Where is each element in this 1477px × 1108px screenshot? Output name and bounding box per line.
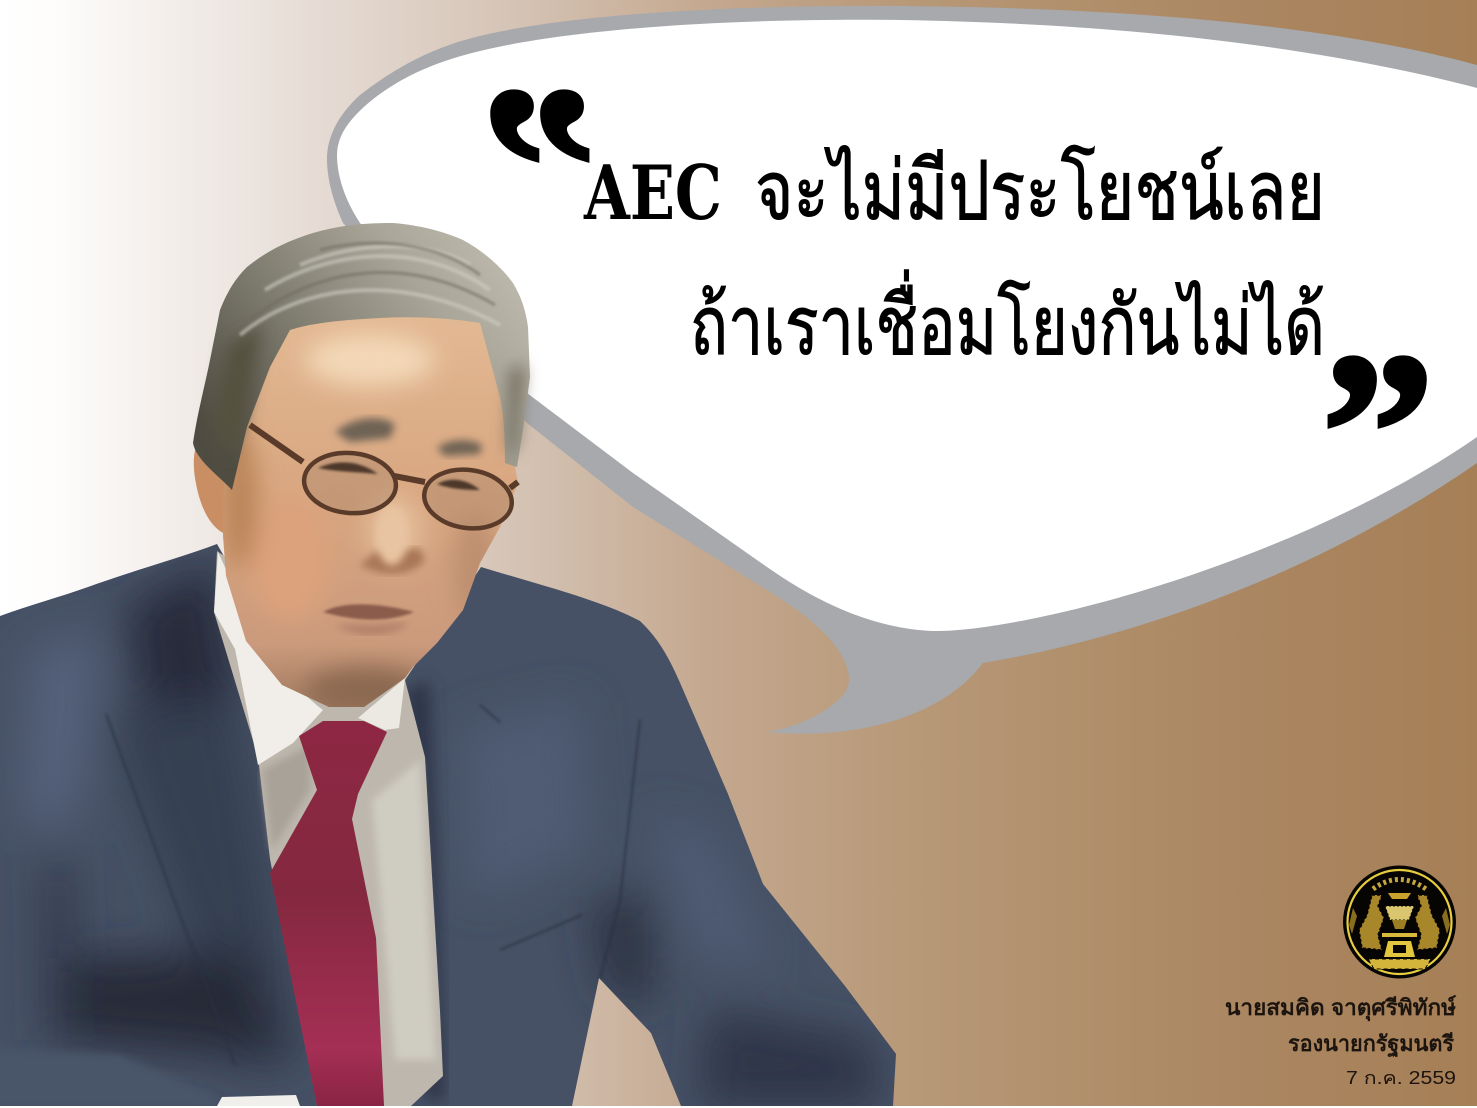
portrait of speaker: [0, 223, 920, 1108]
bubble white fill: [337, 20, 1477, 631]
shirt right fold highlight: [372, 760, 436, 1060]
ear: [194, 428, 245, 535]
quote headline: [583, 146, 1325, 372]
signature: [1225, 995, 1457, 1088]
shirt collar: [214, 552, 323, 765]
top arc ornament: [1373, 880, 1426, 889]
urn: [1388, 893, 1411, 899]
jacket base: [0, 540, 920, 1108]
bubble outline: [327, 6, 1477, 734]
lower sleeve: [33, 1052, 180, 1087]
pedestal: [1384, 941, 1415, 957]
lower lip: [335, 622, 410, 635]
nose highlight: [376, 505, 408, 565]
nose shadow: [360, 548, 425, 574]
hair: [193, 223, 530, 490]
shirt collar right: [358, 678, 405, 730]
name: นายสมคิด จาตุศรีพิทักษ์: [1225, 995, 1457, 1022]
eyes: [318, 462, 480, 490]
facial shading: [222, 334, 497, 712]
quote line 1 Thai: จะไม่มีประโยชน์เลย: [755, 146, 1325, 237]
dark hair strands: [250, 243, 495, 320]
quote line 1 latin: AEC: [583, 149, 722, 237]
jacket seams: [105, 704, 642, 977]
emblem gold ring: [1348, 870, 1452, 974]
closing quotation mark: ”: [1321, 307, 1435, 559]
opening quotation mark: ”: [482, 41, 596, 293]
left lion: [1359, 895, 1384, 950]
white shirt cuff: [217, 1095, 300, 1106]
necktie: [270, 721, 387, 1106]
left lens: [302, 449, 398, 517]
face: [223, 292, 518, 707]
right flame: [1442, 908, 1450, 934]
right lens: [420, 464, 516, 534]
hair shading: [212, 325, 524, 460]
eyebrows: [335, 418, 482, 456]
base: [1368, 959, 1431, 969]
right lion: [1415, 895, 1440, 950]
glasses: [250, 425, 518, 534]
mouth: [323, 604, 414, 620]
emblem ornaments: [1349, 880, 1450, 969]
position: รองนายกรัฐมนตรี: [1288, 1031, 1454, 1058]
jacket: [0, 540, 920, 1108]
jacket shading: [20, 560, 880, 1106]
left flame: [1349, 908, 1357, 934]
government emblem: [1343, 866, 1456, 978]
date: 7 ก.ค. 2559: [1346, 1068, 1456, 1088]
emblem disc: [1343, 866, 1456, 978]
temple and bridge: [250, 425, 518, 488]
speech bubble: [327, 6, 1477, 734]
shirt: [214, 551, 443, 1106]
shirt left shade: [262, 745, 310, 850]
hair strands: [240, 246, 500, 335]
lapel dark band: [405, 680, 445, 1100]
